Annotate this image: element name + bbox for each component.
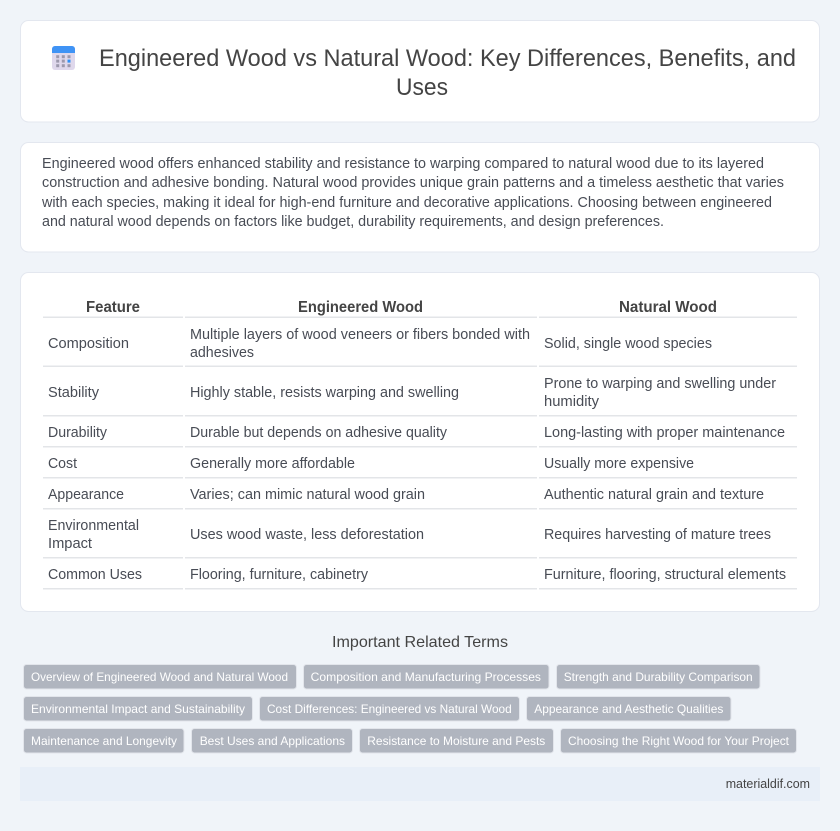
tag: Appearance and Aesthetic Qualities xyxy=(534,702,723,716)
tag: Choosing the Right Wood for Your Project xyxy=(568,734,790,748)
text block: intro paragraph: construction and adhesive bonding. Natural wood provides unique grain patterns and a timeless aesthetic that varies xyxy=(42,175,784,191)
table row: stability: humidity xyxy=(544,394,600,410)
table row: composition xyxy=(48,327,712,361)
tag: Maintenance and Longevity xyxy=(31,734,177,748)
tag: Overview of Engineered Wood and Natural Wood xyxy=(31,670,288,684)
table row: appearance xyxy=(48,487,764,503)
table row: appearance: Varies; can mimic natural wood grain xyxy=(190,487,425,503)
table row: common uses: Common Uses xyxy=(48,567,142,583)
tag: Cost Differences: Engineered vs Natural Wood xyxy=(267,702,512,716)
table header: Feature xyxy=(86,299,140,316)
table row: composition: Multiple layers of wood veneers or fibers bonded with xyxy=(190,327,530,343)
table row: durability: Durability xyxy=(48,425,108,441)
title: Uses xyxy=(396,74,448,101)
table header: Natural Wood xyxy=(619,299,717,316)
table row: cost xyxy=(48,456,694,472)
table row: common uses: Furniture, flooring, structural elements xyxy=(544,567,786,583)
table row: environmental impact: Uses wood waste, less deforestation xyxy=(190,527,424,543)
table row: cost: Cost xyxy=(48,456,77,472)
heading: important related terms: Important Related Terms xyxy=(332,634,508,651)
tag xyxy=(192,728,352,753)
title xyxy=(99,45,796,101)
table row: common uses: Flooring, furniture, cabinetry xyxy=(190,567,369,583)
tag xyxy=(24,728,184,753)
table row: composition: adhesives xyxy=(190,345,254,361)
tag: Environmental Impact and Sustainability xyxy=(31,702,245,716)
icon: calendar xyxy=(52,46,75,70)
table row: cost: Usually more expensive xyxy=(544,456,694,472)
table row: stability: Stability xyxy=(48,385,100,401)
table row: durability: Long-lasting with proper maintenance xyxy=(544,425,785,441)
text block: intro paragraph xyxy=(41,156,784,230)
footer xyxy=(20,767,820,801)
tag xyxy=(560,728,796,753)
tag xyxy=(24,664,296,689)
table row: composition: Composition xyxy=(48,336,129,352)
text block: intro paragraph: Engineered wood offers enhanced stability and resistance to warping compared to natural wood due to its layered xyxy=(42,156,764,172)
tag: Best Uses and Applications xyxy=(200,734,345,748)
table row: environmental impact: Impact xyxy=(48,536,92,552)
table header: Engineered Wood xyxy=(298,299,423,316)
panel: title card xyxy=(20,20,820,122)
tag: Composition and Manufacturing Processes xyxy=(311,670,541,684)
text block: intro paragraph: and natural wood depends on factors like budget, durability requirements, and design preferences. xyxy=(42,214,664,230)
tag group: related terms xyxy=(24,664,796,753)
table row: stability: Highly stable, resists warping and swelling xyxy=(190,385,459,401)
table row: environmental impact xyxy=(48,518,771,552)
footer: materialdif.com xyxy=(726,776,810,791)
tag: Resistance to Moisture and Pests xyxy=(367,734,545,748)
table row: cost: Generally more affordable xyxy=(190,456,355,472)
tag xyxy=(360,728,554,753)
tag: Strength and Durability Comparison xyxy=(564,670,753,684)
tag xyxy=(556,664,760,689)
text block: intro paragraph: with each species, making it ideal for high-end furniture and decorative applications. Choosing between engineered xyxy=(41,195,772,211)
panel: comparison table xyxy=(20,272,820,612)
table row: durability: Durable but depends on adhesive quality xyxy=(190,425,448,441)
table row: composition: Solid, single wood species xyxy=(544,336,712,352)
table row: environmental impact: Requires harvesting of mature trees xyxy=(544,527,771,543)
table header xyxy=(86,299,717,316)
table row: appearance: Authentic natural grain and texture xyxy=(544,487,764,503)
tag xyxy=(304,664,549,689)
table row: environmental impact: Environmental xyxy=(48,518,139,534)
table row: stability: Prone to warping and swelling under xyxy=(544,376,776,392)
tag xyxy=(24,696,252,721)
table row: common uses xyxy=(48,567,786,583)
tag xyxy=(526,696,731,721)
tag xyxy=(260,696,520,721)
table row: durability xyxy=(48,425,785,441)
title: Engineered Wood vs Natural Wood: Key Differences, Benefits, and xyxy=(99,45,796,72)
table row: appearance: Appearance xyxy=(48,487,124,503)
table row: stability xyxy=(48,376,776,410)
panel: intro card xyxy=(20,142,820,252)
